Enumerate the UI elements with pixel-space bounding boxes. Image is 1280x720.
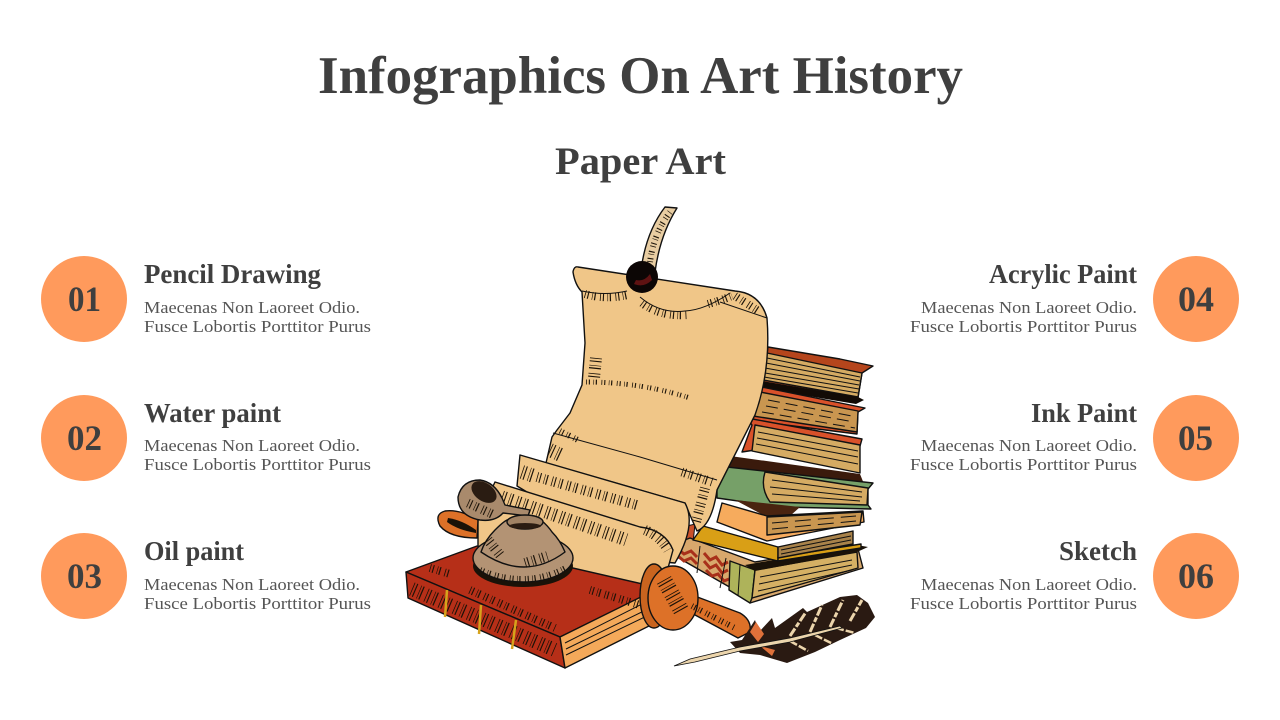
book 5 peach: [717, 500, 864, 541]
item 06: Sketch: Fusce Lobortis Porttitor Purus: [910, 594, 1137, 613]
book 2: [746, 387, 865, 434]
item 01: Pencil Drawing: Maecenas Non Laoreet Odio.: [144, 298, 360, 317]
item 02: Water paint: [41, 395, 371, 481]
icon: wooden end of quill handle: [438, 511, 478, 538]
icon: inkwell: [458, 477, 573, 587]
item 03: Oil paint: 03: [67, 556, 102, 596]
item 04: Acrylic Paint: Fusce Lobortis Porttitor Purus: [910, 317, 1137, 336]
item 05: Ink Paint: Ink Paint: [1031, 398, 1137, 428]
item 02: Water paint: 02: [67, 418, 102, 458]
item 06: Sketch: Maecenas Non Laoreet Odio.: [921, 575, 1137, 594]
subtitle: Paper Art: [555, 140, 726, 183]
book 7 patterned: [677, 538, 868, 603]
item 01: Pencil Drawing: Pencil Drawing: [144, 259, 321, 289]
item 02: Water paint: Water paint: [144, 398, 281, 428]
icon: scroll front fold: [478, 482, 673, 595]
icon: scroll second fold: [517, 455, 689, 563]
item 04: Acrylic Paint: Maecenas Non Laoreet Odio.: [921, 298, 1137, 317]
icon: ribbon: [641, 207, 677, 272]
item 04: Acrylic Paint: [910, 256, 1239, 342]
item 04: Acrylic Paint: 04: [1178, 279, 1214, 319]
item 06: Sketch: 06: [1178, 556, 1214, 596]
item 01: Pencil Drawing: 01: [68, 279, 101, 319]
item 03: Oil paint: Maecenas Non Laoreet Odio.: [144, 575, 360, 594]
icon: scroll roller: [640, 564, 750, 638]
item 05: Ink Paint: 05: [1178, 418, 1213, 458]
item 05: Ink Paint: Maecenas Non Laoreet Odio.: [921, 436, 1137, 455]
item 02: Water paint: Maecenas Non Laoreet Odio.: [144, 436, 360, 455]
icon: parchment scroll: [546, 267, 768, 531]
item 01: Pencil Drawing: [41, 256, 371, 342]
item 04: Acrylic Paint: Acrylic Paint: [989, 259, 1137, 289]
item 06: Sketch: Sketch: [1059, 536, 1137, 566]
item 02: Water paint: Fusce Lobortis Porttitor Purus: [144, 455, 371, 474]
item 03: Oil paint: Oil paint: [144, 536, 244, 566]
illustration: scroll, books, inkwell and quill: [406, 207, 875, 668]
book 4 green: [717, 467, 873, 509]
item 05: Ink Paint: [910, 395, 1239, 481]
icon: red book: [406, 546, 660, 668]
book 3: [726, 418, 864, 484]
item 01: Pencil Drawing: Fusce Lobortis Porttitor Purus: [144, 317, 371, 336]
item 03: Oil paint: Fusce Lobortis Porttitor Purus: [144, 594, 371, 613]
item 05: Ink Paint: Fusce Lobortis Porttitor Purus: [910, 455, 1137, 474]
item 03: Oil paint: [41, 533, 371, 619]
book 1: [760, 347, 873, 404]
item 06: Sketch: [910, 533, 1239, 619]
title: Infographics On Art History: [318, 47, 963, 105]
icon: wax seal: [626, 261, 658, 293]
icon: stack of books: [677, 347, 873, 603]
book 6 yellow: [693, 526, 861, 561]
pattern block behind books: [683, 524, 695, 543]
icon: feather quill: [674, 595, 875, 666]
